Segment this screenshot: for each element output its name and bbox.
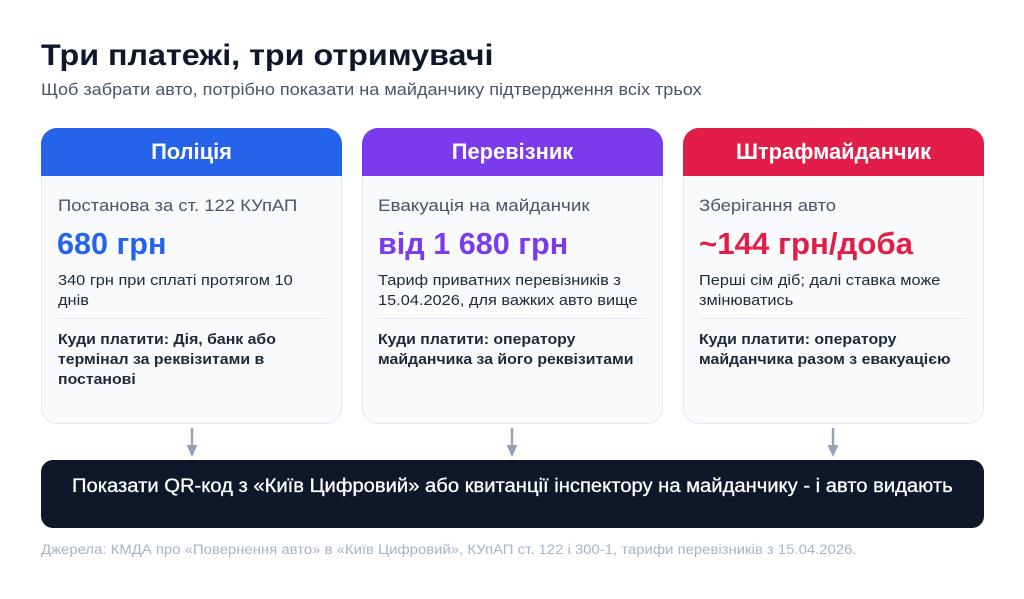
panel heading: police	[41, 128, 342, 176]
police note	[58, 272, 293, 308]
panel: police	[41, 128, 342, 424]
result banner	[41, 460, 984, 528]
panel: carrier	[362, 128, 663, 424]
carrier payment details: майданчика за його реквізитами	[378, 351, 634, 368]
impound note	[699, 272, 940, 308]
subtitle: Щоб забрати авто, потрібно показати на майданчику підтвердження всіх трьох	[41, 81, 702, 99]
carrier payment details: Куди платити: оператору	[378, 331, 575, 348]
police note: днів	[58, 292, 89, 308]
police payment details: термінал за реквізитами в	[58, 351, 264, 368]
panel heading: carrier: Перевізник	[452, 139, 573, 164]
panel heading: carrier	[362, 128, 663, 176]
carrier subtitle: Евакуація на майданчик	[378, 197, 590, 215]
impound price: ~144 грн/доба	[699, 227, 913, 261]
impound payment details: майданчика разом з евакуацією	[699, 351, 950, 368]
impound note: змінюватись	[699, 292, 793, 308]
panel heading: impound lot	[683, 128, 984, 176]
police payment details: постанові	[58, 371, 136, 388]
police price: 680 грн	[57, 227, 166, 261]
result text: Показати QR-код з «Київ Цифровий» або квитанції інспектору на майданчику - і авто видають	[72, 476, 953, 496]
police payment details: Куди платити: Дія, банк або	[58, 331, 276, 348]
sources footnote: Джерела: КМДА про «Повернення авто» в «Київ Цифровий», КУпАП ст. 122 і 300-1, тарифи перевізників з 15.04.2026.	[41, 542, 857, 557]
title: Три платежі, три отримувачі	[41, 39, 493, 72]
impound payment details: Куди платити: оператору	[699, 331, 896, 348]
carrier note: Тариф приватних перевізників з	[378, 272, 621, 288]
arrow: carrier to result	[506, 428, 518, 457]
arrow: impound to result	[828, 428, 838, 457]
panel: impound lot	[683, 128, 984, 424]
impound subtitle: Зберігання авто	[699, 197, 836, 215]
panel heading: impound lot: Штрафмайданчик	[736, 139, 931, 164]
police subtitle: Постанова за ст. 122 КУпАП	[58, 197, 297, 215]
impound note: Перші сім діб; далі ставка може	[699, 272, 940, 288]
carrier note	[378, 272, 637, 308]
arrow: police to result	[186, 428, 198, 457]
carrier payment details	[378, 331, 634, 368]
carrier note: 15.04.2026, для важких авто вище	[378, 292, 637, 308]
police payment details	[58, 331, 276, 388]
panel heading: police: Поліція	[151, 139, 232, 164]
carrier price: від 1 680 грн	[378, 227, 568, 261]
police note: 340 грн при сплаті протягом 10	[58, 272, 293, 288]
impound payment details	[699, 331, 950, 368]
